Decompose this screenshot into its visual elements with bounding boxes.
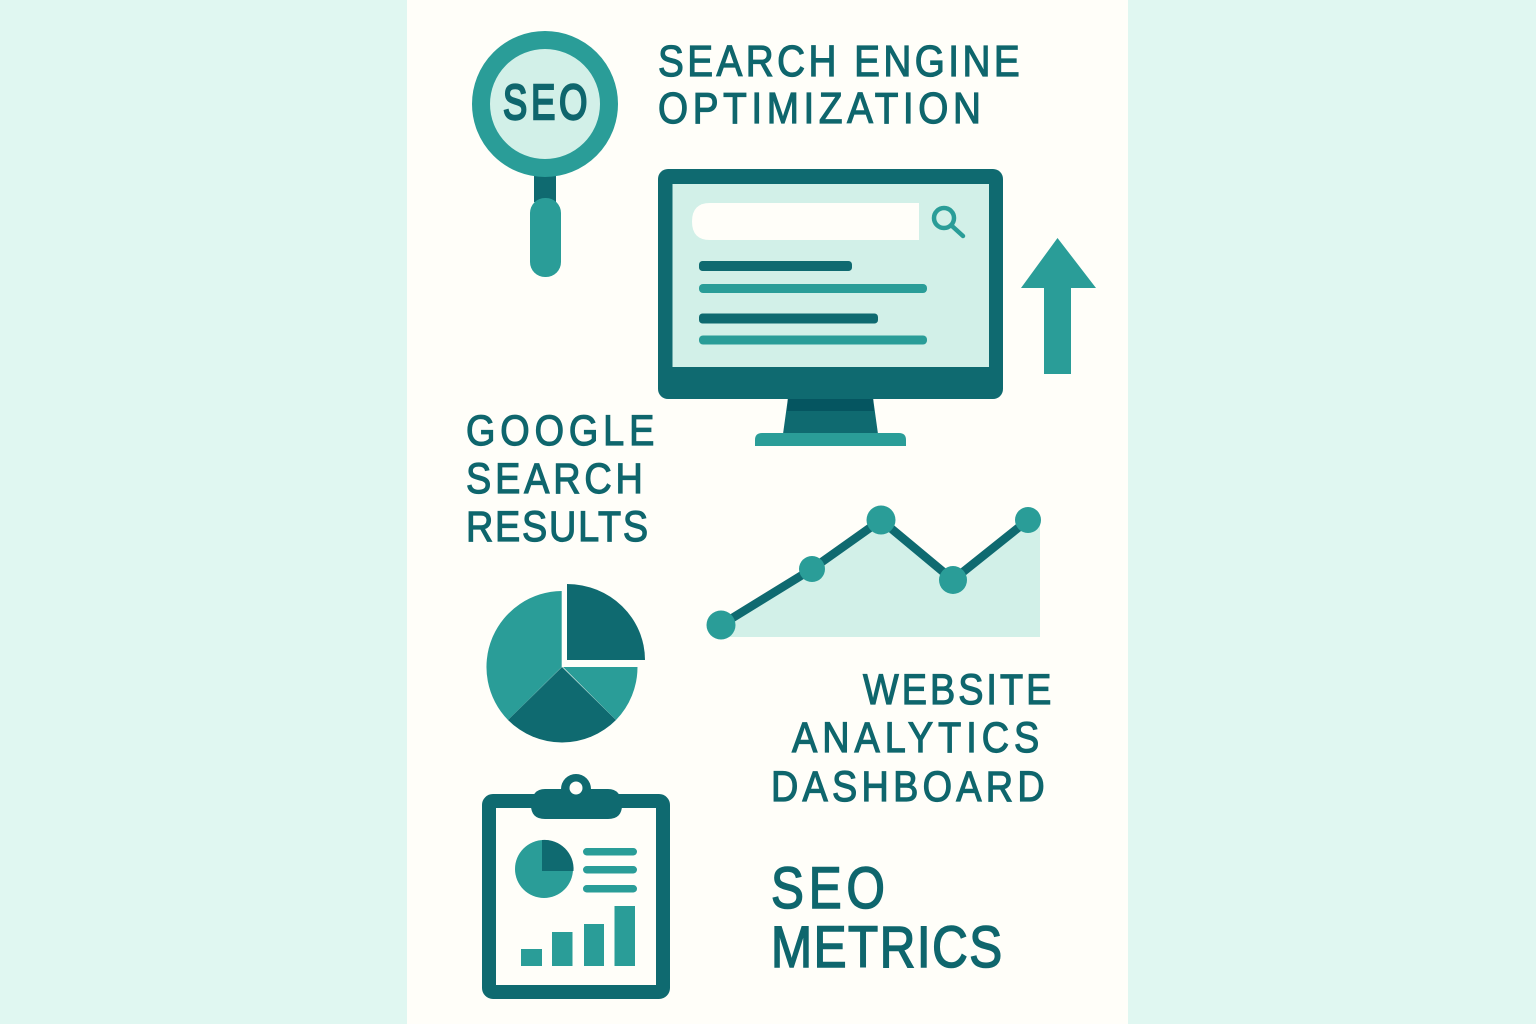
heading: search engine optimization	[658, 36, 1020, 133]
icon: desktop monitor with search results	[658, 169, 1003, 446]
line chart: website analytics	[706, 506, 1041, 640]
bar chart	[521, 906, 635, 966]
heading: SEO metrics: SEO	[771, 856, 885, 921]
heading: search engine optimization: OPTIMIZATION	[658, 83, 981, 133]
heading: website analytics dashboard: ANALYTICS	[792, 713, 1039, 762]
icon: clipboard report	[489, 774, 663, 992]
heading: google search results: GOOGLE	[466, 406, 654, 455]
heading: google search results	[466, 406, 654, 551]
monitor screen	[672, 184, 989, 367]
search bar	[692, 203, 919, 240]
heading: website analytics dashboard: DASHBOARD	[771, 762, 1045, 811]
text lines	[583, 848, 637, 892]
center panel	[407, 0, 1128, 1024]
icon: small magnifier	[934, 208, 963, 236]
heading: website analytics dashboard	[771, 665, 1051, 811]
heading: search engine optimization: SEARCH ENGINE	[658, 36, 1020, 86]
heading: SEO metrics	[771, 856, 1002, 980]
search result lines	[699, 261, 927, 344]
icon: SEO magnifying glass	[481, 40, 609, 277]
arrow: ranking up	[1021, 238, 1096, 374]
heading: SEO metrics: METRICS	[771, 915, 1002, 980]
heading: website analytics dashboard: WEBSITE	[863, 665, 1051, 714]
heading: google search results: SEARCH	[466, 454, 643, 503]
clipboard clip	[531, 774, 622, 819]
icon: SEO magnifying glass: SEO	[503, 76, 587, 130]
heading: google search results: RESULTS	[466, 502, 648, 551]
monitor frame	[658, 169, 1003, 399]
pie chart	[486, 584, 645, 743]
small pie	[515, 840, 574, 898]
clipboard body	[489, 801, 663, 992]
monitor stand	[755, 398, 906, 446]
